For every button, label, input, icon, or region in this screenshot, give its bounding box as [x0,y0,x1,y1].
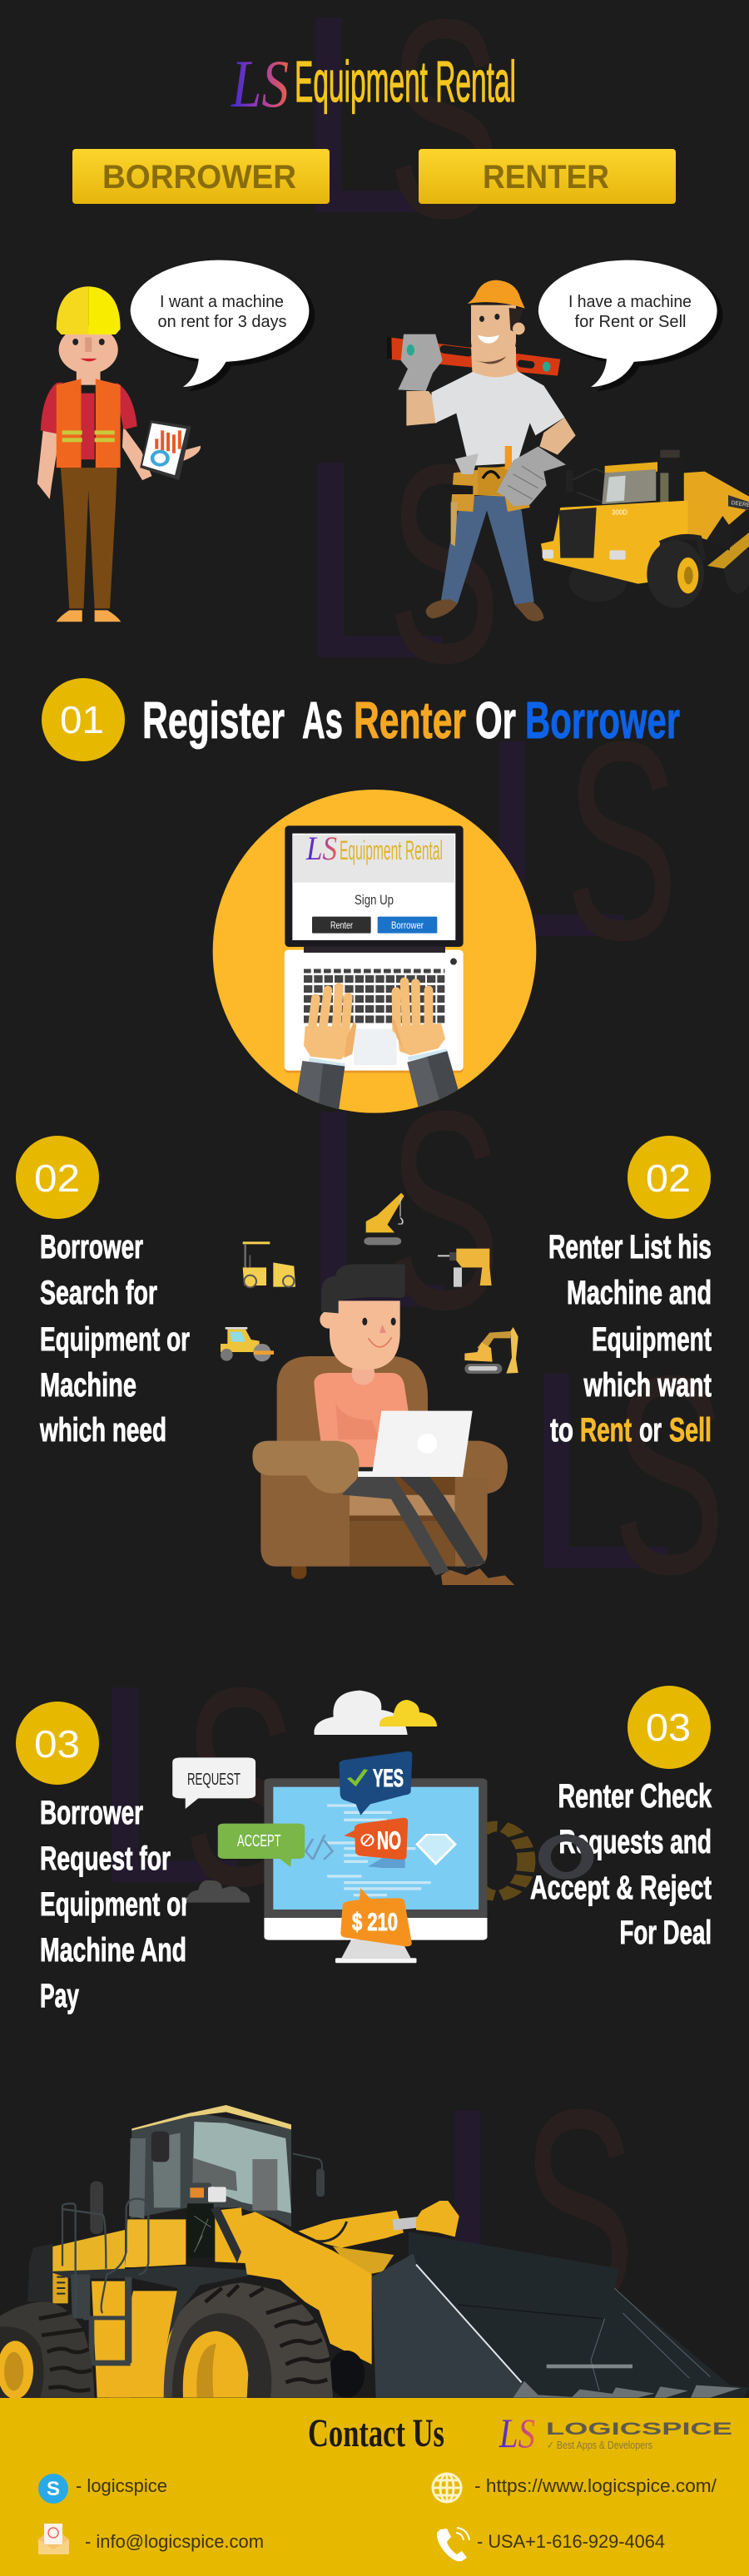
icon: drill [438,1249,492,1287]
step 01 heading: Borrower [525,692,680,750]
icon: mail [38,2524,69,2554]
logicspice logo [499,2410,732,2456]
icon: forklift roller [243,1241,295,1287]
step 01 heading: Register [142,692,285,750]
speech bubble: borrower: on rent for 3 days [158,313,286,331]
renter list text: or [639,1412,662,1449]
yes label: YES [373,1765,404,1792]
diamond [417,1835,455,1864]
laptop sign-up illustration [213,790,536,1113]
text: L [520,1313,677,1629]
step 03 badge: renter: 03 [646,1706,691,1749]
request label: REQUEST [187,1771,241,1789]
step 01 heading [142,692,680,750]
bubble: request [172,1757,255,1809]
icon: road roller [221,1327,274,1361]
rear wheel [0,2302,94,2398]
third wheel [329,2351,365,2398]
renter list text: to [550,1412,573,1449]
borrower search text [39,1229,190,1449]
text: S [388,406,501,722]
text: L [89,1627,246,1943]
website text: - https://www.logicspice.com/ [474,2475,717,2496]
LS mark: LS [231,46,289,121]
renter check text: For Deal [619,1915,712,1951]
button: renter: RENTER [483,159,609,196]
email text: - info@logicspice.com [85,2531,264,2552]
borrower request text: Machine And [40,1932,186,1969]
speech bubble: renter: I have a machine [568,293,692,311]
borrower search text: which need [39,1412,166,1449]
skype text: - logicspice [76,2475,167,2496]
contact footer [0,2398,749,2576]
speech bubble: borrower [131,260,315,391]
step 03 badge: borrower [16,1702,99,1785]
icon: excavator [464,1327,518,1374]
renter check text [530,1778,712,1951]
legs and boots [441,495,534,605]
borrower request text: Equipment or [40,1886,190,1923]
text: S [388,1053,501,1369]
borrower request text: Borrower [40,1795,143,1831]
character: renter worker [387,280,576,622]
bubble: yes [340,1751,412,1816]
model number: 300D [612,508,627,516]
borrower request text: Request for [40,1840,171,1877]
bucket [372,2201,749,2398]
icon: skype [38,2474,68,2504]
renter list text: Rent [580,1412,632,1449]
icon: crane [364,1193,404,1245]
bubble: price [340,1888,412,1946]
step 01 heading: As [302,692,343,750]
button: borrower [72,149,330,204]
text: Equipment Rental [295,49,516,114]
step 03 badge: renter [627,1686,711,1769]
monitor illustration [172,1691,588,1963]
borrower search text: Machine [40,1367,136,1404]
icon: globe [433,2474,461,2502]
accept label: ACCEPT [237,1832,281,1850]
lower glove [497,447,566,506]
step 02 badge: renter: 02 [646,1157,691,1200]
screen logo text: LS [305,830,337,867]
bubble: accept [218,1824,305,1867]
step 02 badge: borrower [16,1136,99,1219]
boom arm [333,2247,394,2274]
sleeves [297,1049,459,1112]
renter list text: Sell [669,1412,712,1449]
renter list text [548,1229,712,1449]
icon: phone [437,2528,469,2561]
body [27,2244,52,2302]
laptop sign-up illustration: Equipment Rental [340,835,443,865]
step 01 heading: Renter [354,692,466,750]
wheel loader photo [0,2105,749,2399]
cab [131,2112,291,2227]
left hand [312,988,348,1029]
step 01 badge [42,678,125,761]
speech bubble: borrower: I want a machine [160,293,284,311]
step 03 badge: borrower: 03 [34,1722,80,1766]
text: S [613,1317,726,1633]
header logo [231,46,516,121]
borrower button label: Borrower [391,919,424,931]
front wheel [164,2282,333,2398]
button: renter [419,149,676,204]
icon: skype: S [47,2478,60,2500]
text: L [431,2049,588,2365]
borrower request text [40,1795,190,2014]
logicspice logo: ✓ Best Apps & Developers [547,2439,652,2451]
dump truck [541,450,749,608]
phone text: - USA+1-616-929-4064 [477,2531,665,2552]
ladder and rails [71,2274,131,2365]
text: L [476,681,633,997]
person in armchair with laptop [252,1264,514,1585]
borrower search text: Search for [40,1275,157,1311]
text: S [183,1629,296,1945]
contact heading: Contact Us [308,2411,444,2455]
character: borrower worker [37,286,201,622]
tool belt [451,464,530,512]
bubble: no [344,1818,408,1860]
text: L [297,1051,454,1367]
right hand [396,982,429,1029]
step 02 badge: renter [627,1136,711,1219]
borrower request text: Pay [40,1978,79,2014]
speech bubble: renter: for Rent or Sell [574,313,686,331]
speech bubble: renter [538,260,722,391]
step 01 heading: Or [475,692,516,750]
logicspice logo: LOGICSPICE [546,2420,732,2439]
borrower search text: Equipment or [40,1321,190,1358]
button: borrower: BORROWER [102,159,296,196]
logicspice logo: LS [499,2410,535,2456]
level tool [387,337,560,376]
text: S [522,2051,635,2367]
no label: NO [377,1827,401,1855]
text: L [295,402,452,718]
step 01 badge: 01 [60,698,104,741]
borrower search text: Borrower [40,1229,143,1266]
renter button label: Renter [330,919,353,931]
sign up text: Sign Up [355,892,394,908]
step 02 badge: borrower: 02 [34,1157,80,1200]
price label: $ 210 [352,1909,398,1936]
text: S [565,683,678,999]
